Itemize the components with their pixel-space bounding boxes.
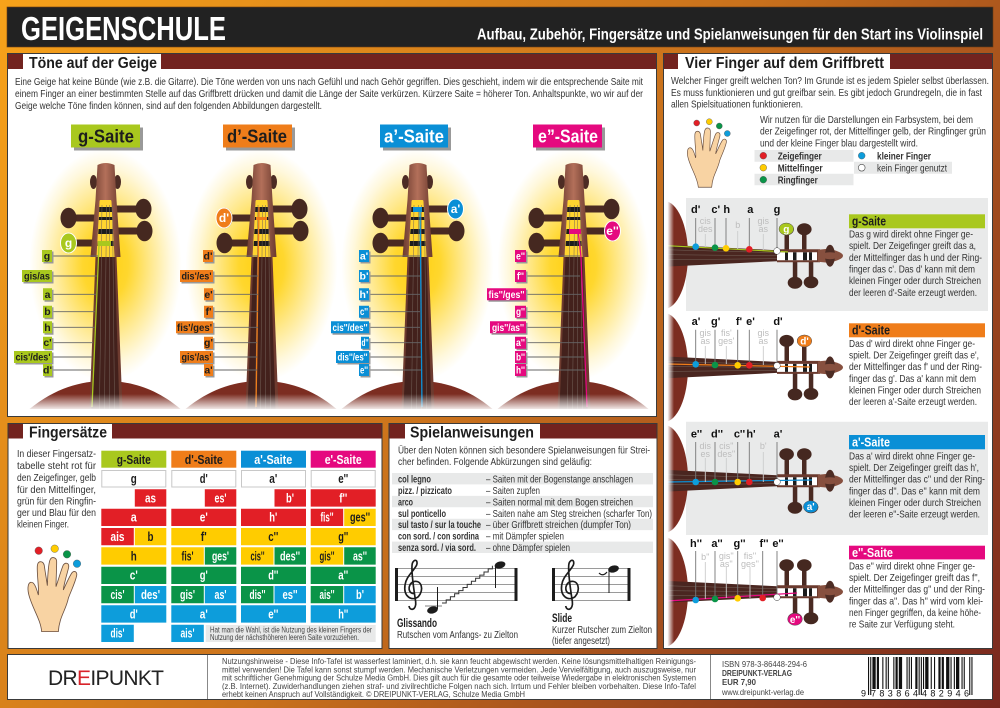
badge: d'-Saite: d’-Saite xyxy=(227,126,287,146)
header bar xyxy=(7,7,993,48)
table cell notes: c' xyxy=(130,568,138,583)
table cell notes: des' xyxy=(141,587,160,602)
table footnote: Hat man die Wahl, ist die Nutzung des kleinen Fingers der xyxy=(210,626,372,634)
note labels: d string xyxy=(176,250,258,378)
table cell notes: dis' xyxy=(110,626,124,641)
violin head: a string xyxy=(342,149,494,409)
note labels: g string: d' xyxy=(43,364,52,376)
gray section backgrounds xyxy=(686,198,988,535)
table cell notes: h'' xyxy=(338,606,348,621)
legal notice: erhebt keinen Anspruch auf Vollständigkeit. © DREIPUNKT-VERLAG, Schulze Media GmbH xyxy=(222,689,525,699)
intro text xyxy=(15,76,643,112)
table cell notes: e'' xyxy=(268,606,278,621)
section: a string diagram: d'' xyxy=(711,428,723,440)
table cell notes: cis' xyxy=(110,587,124,602)
fade of violin bodies xyxy=(10,394,654,411)
violin head: d string: d' xyxy=(219,211,229,225)
badge: e''-Saite: e”-Saite xyxy=(538,126,598,146)
badge: g-Saite xyxy=(71,124,143,150)
table cell notes: g xyxy=(131,471,137,486)
note labels: d string: d' xyxy=(204,250,212,262)
section: g string diagram: b xyxy=(735,220,740,230)
finger colour legend: kleiner Finger xyxy=(877,150,931,162)
panel: Spielanweisungen xyxy=(389,424,657,648)
intro text xyxy=(671,75,989,110)
text block: tabelle steht rot für xyxy=(17,460,96,472)
note labels: g string: h xyxy=(44,322,51,334)
table cell notes: as'' xyxy=(353,548,367,563)
table cell notes: es'' xyxy=(282,587,298,602)
abbreviations table: arco xyxy=(398,496,413,508)
note labels: e string: h'' xyxy=(516,364,525,376)
legal notice: mittel verwenden! Die Tafel kann sonst stumpf werden. Mechanische Verletzungen vermeiden. Jede Vervielfältigung, auch auszugsweise, nur xyxy=(222,664,696,674)
section: d string diagram xyxy=(664,311,843,423)
table cell notes: gis'' xyxy=(320,548,334,563)
section: e string diagram: g'' xyxy=(734,538,746,550)
section: a string diagram: e'' xyxy=(691,428,703,440)
table cell notes: g'' xyxy=(338,529,348,544)
legal notice xyxy=(222,656,696,699)
icon: small hand xyxy=(687,119,730,187)
table cell notes: f'' xyxy=(339,490,347,505)
section: e string diagram: h'' xyxy=(690,538,702,550)
violin head: e string: e'' xyxy=(606,224,619,238)
heading: Töne auf der Geige xyxy=(29,55,157,72)
text: a'-Saite xyxy=(849,434,985,520)
section: d string diagram: e' xyxy=(746,316,755,328)
intro text: Eine Geige hat keine Bünde (wie z.B. die Gitarre). Die Töne werden von uns nach Gefühl und nach Gehör gegriffen. Dies geschieht, indem wir die entsprechende Saite mit xyxy=(15,76,643,88)
note labels: g string: g xyxy=(44,250,50,262)
note labels: e string xyxy=(487,250,585,378)
footer xyxy=(8,654,992,700)
table cell notes: h xyxy=(131,548,137,563)
note labels: d string: e' xyxy=(204,289,213,301)
note labels: a string: e'' xyxy=(360,364,368,376)
note labels: g string: c' xyxy=(43,337,52,349)
section: g string diagram: a xyxy=(747,204,754,216)
text: Glissando: Rutschen vom Anfangs- zu Zielton xyxy=(397,629,518,641)
note labels: d string: a' xyxy=(204,364,213,376)
note labels: d string: f' xyxy=(206,306,212,318)
table cell notes: ais'' xyxy=(320,587,334,602)
text: Glissando: Glissando xyxy=(397,618,437,630)
table header row: e'-Saite xyxy=(325,452,362,467)
section: g string diagram: as xyxy=(759,224,769,234)
note labels: a string: cis''/des'' xyxy=(332,322,368,334)
intro text: Über den Noten können sich besondere Spielanweisungen für Strei- xyxy=(398,444,650,456)
table header row: a'-Saite xyxy=(254,452,292,467)
note labels: g string: a xyxy=(45,289,51,301)
table cell notes: fis' xyxy=(182,548,194,563)
text: a'-Saite: a'-Saite xyxy=(852,434,890,450)
abbreviations table: – Saiten normal mit dem Bogen streichen xyxy=(486,496,633,508)
note labels: a string: dis''/es'' xyxy=(338,352,368,364)
section: e string diagram: e'' xyxy=(790,615,800,626)
note labels: d string: fis'/ges' xyxy=(177,322,212,334)
section: d string diagram: d' xyxy=(800,336,809,348)
intro text xyxy=(398,444,650,468)
text block xyxy=(17,448,96,530)
section: a string diagram: es xyxy=(701,449,711,459)
note labels: a string: c'' xyxy=(360,306,368,318)
music staff: glissando xyxy=(395,560,518,615)
abbreviations table: – ohne Dämpfer spielen xyxy=(486,542,570,554)
section: g string diagram: des xyxy=(698,224,713,234)
table cell notes: fis'' xyxy=(320,510,334,525)
icon: hand with finger colours xyxy=(28,545,81,632)
note labels: e string: a'' xyxy=(516,337,525,349)
table cell notes xyxy=(110,471,370,641)
violin head: g string: g xyxy=(65,236,72,250)
table header row: g-Saite xyxy=(117,452,151,467)
section: d string diagram: fis' xyxy=(721,328,732,338)
text: g-Saite: Das g wird direkt ohne Finger ge- xyxy=(849,228,973,240)
abbreviations table: col legno xyxy=(398,474,431,486)
table cell notes: ais xyxy=(110,529,124,544)
barcode xyxy=(861,657,972,698)
finger colour legend: Ringfinger xyxy=(778,174,818,186)
table cell notes: h' xyxy=(269,510,277,525)
table cell notes: d' xyxy=(130,606,138,621)
table cell notes: des'' xyxy=(280,548,300,563)
badge: d'-Saite xyxy=(223,124,295,150)
section: a string diagram: b' xyxy=(760,441,767,451)
table cell notes: ges' xyxy=(212,548,229,563)
table cell notes: d' xyxy=(200,471,208,486)
table cell notes: b' xyxy=(356,587,364,602)
violin head: e string xyxy=(498,149,650,409)
abbreviations table: con sord. / con sordina xyxy=(398,531,479,543)
section: g string diagram: d' xyxy=(691,204,701,216)
text block: In dieser Fingersatz- xyxy=(17,448,96,460)
section: e string diagram: as'' xyxy=(720,559,733,569)
note labels: e string: f'' xyxy=(517,270,524,282)
text block: kleinen Finger. xyxy=(17,518,69,530)
text block: ger und Blau für den xyxy=(17,507,96,519)
legal notice: mit schriftlicher Genehmigung der Schulze Media GmbH. Dies gilt auch für die gesamte oder teilweise Wiedergabe in elektronischen Systemen xyxy=(222,673,696,683)
colour system text: und der kleine Finger blau dargestellt wird. xyxy=(760,138,918,150)
note labels: e string: gis''/as'' xyxy=(492,322,524,334)
section: e string diagram: ges'' xyxy=(741,559,759,569)
section: e string diagram xyxy=(664,535,843,648)
text: g-Saite xyxy=(849,214,985,299)
text: e''-Saite xyxy=(849,545,985,630)
barcode: 482946 xyxy=(922,688,969,698)
panel: Töne auf der Geige xyxy=(8,54,656,416)
intro text: allen Spielsituationen funktionieren. xyxy=(671,98,803,110)
table cell notes: as xyxy=(145,490,156,505)
colour system text xyxy=(760,114,986,150)
table cell notes: g' xyxy=(200,568,208,583)
barcode: 9 xyxy=(861,688,866,698)
table cell notes: es' xyxy=(214,490,226,505)
badge: g-Saite: g-Saite xyxy=(78,126,134,146)
legal notice: (z.B. Internet). Zuwiderhandlungen ziehen straf- und zivilrechtliche Folgen nach sich. Irrtum und Fehler bleiben vorbehalten. Diese Info-Tafel xyxy=(222,681,696,691)
barcode: 783864 xyxy=(871,688,918,698)
table cell notes: b' xyxy=(286,490,294,505)
table cell notes: gis' xyxy=(180,587,195,602)
fingering table xyxy=(101,451,376,642)
section: d string diagram: gis xyxy=(758,328,770,338)
section: d string diagram: as xyxy=(759,336,769,346)
section: g string diagram: gis xyxy=(758,216,770,226)
section: d string diagram: f' xyxy=(736,316,743,328)
heading: Spielanweisungen xyxy=(410,424,534,442)
finger colour legend: Zeigefinger xyxy=(778,150,822,162)
publisher info: www.dreipunkt-verlag.de xyxy=(721,687,804,697)
section: d string diagram: d' xyxy=(773,316,783,328)
section: g string diagram: cis xyxy=(700,216,711,226)
note labels: d string: g' xyxy=(204,337,213,349)
table cell notes: b xyxy=(148,529,154,544)
abbreviations table: – Saiten nahe am Steg streichen (scharfer Ton) xyxy=(486,508,652,520)
table cell notes: f' xyxy=(201,529,207,544)
section: g string diagram: g xyxy=(774,204,780,216)
table footnote: Nutzung der nächsthöheren leeren Saite vorzuziehen. xyxy=(210,633,359,642)
note labels: e string: b'' xyxy=(516,352,525,364)
text: Glissando xyxy=(397,618,518,641)
text: Slide: Slide xyxy=(552,613,572,625)
table cell notes: cis'' xyxy=(250,548,264,563)
badge: a'-Saite: a’-Saite xyxy=(384,126,444,146)
table footnote xyxy=(210,626,372,642)
text: e''-Saite: e''-Saite xyxy=(852,545,893,560)
table cell notes: d'' xyxy=(268,568,278,583)
section: e string diagram: f'' xyxy=(760,538,769,550)
violin head: d string xyxy=(186,149,338,409)
table cell fills xyxy=(101,470,376,642)
section: a string diagram: cis'' xyxy=(719,441,734,451)
violin head: a string: a' xyxy=(451,202,460,216)
note labels: e string: e'' xyxy=(516,250,525,262)
table cell notes: as' xyxy=(214,587,226,602)
table cell notes: c'' xyxy=(268,529,278,544)
abbreviations table: sul tasto / sur la touche xyxy=(398,519,481,531)
section: e string diagram: fis'' xyxy=(744,551,756,561)
note labels: g string: b xyxy=(44,306,51,318)
section: d string diagram: a' xyxy=(692,316,701,328)
abbreviations table: pizz. / pizzicato xyxy=(398,485,452,497)
intro text: cher befinden. Folgende Abkürzungen sind geläufig: xyxy=(398,456,592,468)
publisher info: ISBN 978-3-86448-294-6 xyxy=(722,659,807,669)
text block: grün für den Ringfin- xyxy=(17,496,96,508)
table cell notes: ges'' xyxy=(350,510,370,525)
heading: Vier Finger auf dem Griffbrett xyxy=(685,55,885,72)
table cell notes: a'' xyxy=(338,568,348,583)
section: a string diagram: a' xyxy=(807,502,815,513)
heading: Fingersätze xyxy=(29,424,107,442)
finger colour legend: Mittelfinger xyxy=(778,162,823,174)
note labels: e string: g'' xyxy=(516,306,525,318)
text block: den Zeigefinger, gelb xyxy=(17,472,96,484)
publisher info: DREIPUNKT-VERLAG xyxy=(722,668,792,678)
music staff: slide xyxy=(552,560,630,609)
table cell notes: dis'' xyxy=(250,587,266,602)
section: e string diagram: a'' xyxy=(711,538,723,550)
table cell notes: ais' xyxy=(180,626,194,641)
note labels: g string xyxy=(14,250,98,378)
section: a string diagram: h' xyxy=(746,428,756,440)
intro text: einem Finger an einer bestimmten Stelle auf das Griffbrett drücken und damit die Länge der Saite verkürzen. Kürzere Saite = höherer Ton. Anhaltspunkte, wo wir auf der xyxy=(15,88,643,100)
text: Slide xyxy=(552,613,652,647)
publisher info: EUR 7,90 xyxy=(722,677,756,687)
note labels: d string: dis'/es' xyxy=(182,270,212,282)
abbreviations table: senza sord. / via sord. xyxy=(398,542,476,554)
text: d'-Saite xyxy=(849,322,985,408)
text block: für den Mittelfinger, xyxy=(17,484,96,496)
table cell notes: e'' xyxy=(338,471,348,486)
text: Slide: Kurzer Rutscher zum Zielton xyxy=(552,624,652,636)
panel: Fingersätze xyxy=(8,424,382,648)
intro text: Geige welche Töne finden können, sind auf den folgenden Abbildungen dargestellt. xyxy=(15,100,322,112)
note labels: a string: a' xyxy=(360,250,368,262)
section: d string diagram: gis xyxy=(700,328,712,338)
note labels: a string: b' xyxy=(360,270,368,282)
section: g string diagram: g xyxy=(783,224,789,236)
text: Slide: (tiefer angesetzt) xyxy=(552,635,610,647)
section: g string diagram: c' xyxy=(711,204,720,216)
section: d string diagram: ges' xyxy=(718,336,735,346)
note labels: a string xyxy=(331,250,421,378)
note labels: a string: h' xyxy=(360,289,368,301)
badge: a'-Saite xyxy=(380,124,451,150)
table header row xyxy=(101,451,376,468)
note labels: g string: gis/as xyxy=(24,270,50,282)
section: e string diagram: gis'' xyxy=(719,551,734,561)
table cell notes: a xyxy=(131,510,137,525)
table cell notes: a' xyxy=(200,606,208,621)
note labels: e string: fis''/ges'' xyxy=(488,289,524,301)
legal notice: Nutzungshinweise - Diese Info-Tafel ist wasserfest laminiert, d.h. sie kann feucht abgewischt werden. Keine lösungsmittelhaltigen Reinigungs- xyxy=(222,656,696,666)
text: g-Saite: g-Saite xyxy=(852,214,886,228)
violin head: g string xyxy=(30,149,182,409)
section: a string diagram: c'' xyxy=(734,428,746,440)
section: a string diagram xyxy=(664,423,843,535)
table cell notes: e' xyxy=(200,510,208,525)
section: d string diagram: g' xyxy=(711,316,721,328)
publisher info xyxy=(721,659,807,697)
section: a string diagram: a' xyxy=(774,428,783,440)
abbreviations table xyxy=(392,473,653,554)
abbreviations table: – Saiten zupfen xyxy=(486,485,540,497)
note labels: d string: gis'/as' xyxy=(182,352,212,364)
note labels: a string: d'' xyxy=(362,337,368,349)
section: g string diagram xyxy=(664,199,843,311)
table header row: d'-Saite xyxy=(185,452,223,467)
abbreviations table: sul ponticello xyxy=(398,508,446,520)
section: g string diagram: h xyxy=(723,204,730,216)
abbreviations table: – über Griffbrett streichen (dumpfer Ton) xyxy=(486,519,631,531)
logo: DREIPUNKT xyxy=(48,667,164,690)
abbreviations table: – Saiten mit der Bogenstange anschlagen xyxy=(486,474,633,486)
section: a string diagram: dis xyxy=(700,441,712,451)
section: e string diagram: b'' xyxy=(701,552,710,562)
section: e string diagram: e'' xyxy=(772,538,784,550)
table cell notes: a' xyxy=(269,471,277,486)
abbreviations table: – mit Dämpfer spielen xyxy=(486,531,564,543)
text: d'-Saite: d'-Saite xyxy=(852,322,890,338)
finger colour legend xyxy=(754,150,952,186)
panel: Vier Finger auf dem Griffbrett xyxy=(664,54,992,648)
text: e''-Saite: re Saite zur Verfügung steht. xyxy=(849,618,955,630)
title: GEIGENSCHULE xyxy=(21,11,226,48)
note labels: g string: cis'/des' xyxy=(16,352,50,364)
finger colour legend: kein Finger genutzt xyxy=(877,162,947,174)
section: d string diagram: as xyxy=(701,336,711,346)
section: a string diagram: des'' xyxy=(717,449,736,459)
